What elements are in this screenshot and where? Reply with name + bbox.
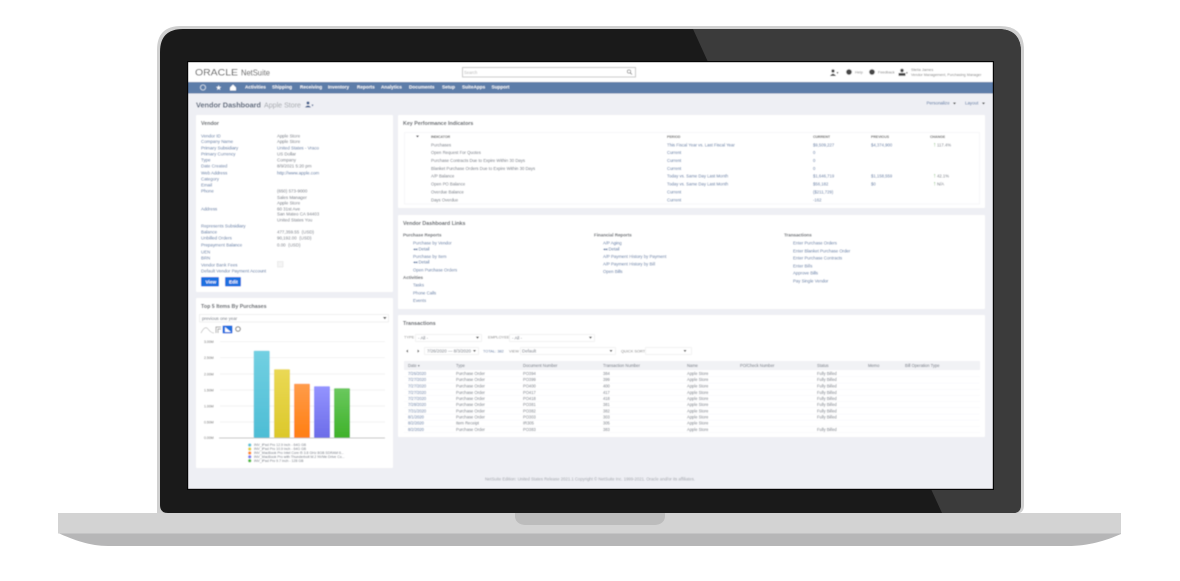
axis labels: 1.50M — [204, 388, 214, 392]
kpi indicators: Open PO Balance — [431, 182, 466, 187]
vendor field labels: Prepayment Balance — [201, 243, 243, 248]
navigation bar: Reports — [357, 85, 375, 90]
vendor field values: Apple Store — [277, 139, 301, 144]
kpi change values: N/A — [937, 182, 944, 187]
vendor field labels: Email — [201, 183, 212, 188]
kpi change values: ↑ — [933, 182, 936, 188]
transaction filters — [404, 334, 692, 354]
kpi current values: ($211,729) — [813, 189, 834, 194]
kpi indicators: Blanket Purchase Orders Due to Expire Within 30 Days — [431, 166, 535, 171]
kpi current values: $56,182 — [813, 182, 829, 187]
axis labels: 1.00M — [204, 404, 214, 408]
laptop lid — [157, 26, 1024, 513]
kpi previous values: $0 — [871, 182, 876, 187]
vendor field labels: Unbilled Orders — [201, 236, 233, 241]
transactions table header: Document Number — [523, 363, 558, 368]
vendor field values: Sales Manager — [277, 195, 307, 200]
kpi periods: Current — [667, 197, 682, 202]
transactions links — [784, 233, 851, 284]
vendor field labels: Category — [201, 177, 220, 182]
navigation bar: Activities — [245, 85, 266, 90]
transaction filters: TYPE — [404, 334, 415, 340]
transactions table rows: 7/26/2020 — [408, 371, 427, 376]
user tools — [830, 67, 982, 77]
kpi current values: $1,646,719 — [813, 174, 835, 179]
vendor field labels: Primary Subsidiary — [201, 145, 239, 150]
transactions table rows: Apple Store — [687, 390, 709, 395]
transactions table rows: Fully Billed — [817, 377, 838, 382]
view button: View — [206, 280, 216, 284]
user tools: Help — [855, 70, 863, 74]
transactions table rows: PO399 — [523, 377, 536, 382]
vendor field labels: UEN — [201, 249, 210, 254]
purchase reports links: Open Purchase Orders — [413, 267, 457, 272]
transactions table rows: Apple Store — [687, 414, 709, 420]
period dropdown: previous one year — [202, 316, 238, 321]
transaction filters: QUICK SORT — [621, 348, 646, 353]
vendor field labels: Vendor ID — [201, 134, 221, 139]
purchase reports links — [403, 233, 457, 272]
transactions table rows: Fully Billed — [817, 414, 838, 420]
transactions links: Enter Purchase Orders — [793, 241, 837, 246]
kpi change values: ↑ — [933, 174, 936, 180]
kpi previous values: $1,158,559 — [871, 174, 893, 179]
transactions table rows: Fully Billed — [817, 371, 838, 376]
panel: key performance indicators — [398, 115, 985, 208]
transactions table rows: PO303 — [523, 414, 536, 420]
kpi indicators: Open Request For Quotes — [431, 150, 481, 155]
financial reports links: Open Bills — [603, 269, 623, 274]
purchase reports links: Purchase by Vendor — [413, 241, 452, 246]
transactions table rows: PO417 — [523, 390, 536, 395]
transactions table rows: Purchase Order — [456, 396, 486, 401]
transactions links: Approve Bills — [793, 271, 818, 276]
transaction filters: - All - — [512, 336, 523, 341]
purchase reports links: Purchase by Item — [413, 254, 447, 259]
chart type icons — [201, 326, 240, 334]
navigation bar: Analytics — [381, 85, 402, 90]
chart legend: INV_iPad Pro 9.7 inch - 128 GB — [254, 459, 304, 463]
kpi change values: ↑ — [933, 142, 936, 148]
kpi current values: 0 — [813, 158, 816, 163]
panel: vendor: Vendor — [201, 121, 219, 127]
nav icons: ★ — [216, 84, 222, 92]
navigation bar: Inventory — [328, 85, 349, 90]
transactions table rows: Purchase Order — [456, 427, 486, 432]
chart legend: INV_iPad Pro 12.9 inch - 64G GB — [254, 443, 307, 447]
transactions table rows: 382 — [603, 408, 611, 414]
transactions table header: Bill Operation Type — [905, 363, 940, 368]
transactions table rows: 400 — [603, 384, 611, 388]
activities links: Phone Calls — [413, 290, 436, 295]
financial reports links: A/P Aging — [603, 241, 622, 246]
footer text: NetSuite Edition: United States Release 2021.1 Copyright © NetSuite Inc. 1999-2021. Oracle and/or its affiliates. — [485, 476, 695, 482]
vendor field values: 477,359.55 (USD) — [277, 230, 315, 235]
chart legend: INV_MacBook Pro with Thunderbolt M.2 NVMe Drive Co... — [254, 455, 345, 459]
vendor field labels: Balance — [201, 230, 218, 235]
vendor field labels: Date Created — [201, 164, 228, 169]
kpi table header: CHANGE — [930, 135, 946, 139]
transactions table header: PO/Check Number — [740, 363, 775, 368]
activities links: Activities — [403, 275, 424, 280]
transactions links: Enter Purchase Contracts — [793, 256, 842, 261]
kpi change values: 117.4% — [937, 142, 951, 147]
transactions table rows: 383 — [603, 427, 611, 432]
vendor field values: Apple Store — [277, 201, 301, 206]
kpi change values — [933, 142, 951, 188]
transaction filters: 7/26/2020 — 8/3/2020 — [427, 349, 471, 354]
user tools: Vendor Management, Purchasing Manager — [911, 73, 982, 77]
navigation bar: Documents — [409, 85, 435, 90]
transactions table rows: 418 — [603, 396, 611, 401]
panel: vendor dashboard links — [398, 215, 985, 309]
kpi periods: Current — [667, 189, 682, 194]
transactions table rows: Apple Store — [687, 427, 709, 432]
vendor field values: United States You — [277, 218, 313, 223]
transactions table header: Type — [456, 363, 466, 368]
page actions: Layout — [965, 101, 979, 106]
logo: NetSuite — [241, 68, 270, 78]
transactions table rows: 8/2/2020 — [408, 420, 425, 426]
transactions table rows: 7/27/2020 — [408, 377, 427, 382]
transactions table rows: Apple Store — [687, 371, 709, 376]
transactions table rows: Purchase Order — [456, 408, 486, 414]
transactions table rows: Apple Store — [687, 420, 709, 426]
chart legend: INV_MacBook Pro Intel Core i5 3.8 GHz 8GB SDRAM 6... — [254, 451, 344, 455]
transactions table header — [404, 361, 980, 370]
transactions table rows: Purchase Order — [456, 377, 486, 382]
transactions table rows: PO418 — [523, 396, 536, 401]
transactions table rows: PO382 — [523, 408, 536, 414]
kpi indicators: Purchases — [431, 142, 451, 147]
kpi periods: This Fiscal Year vs. Last Fiscal Year — [667, 142, 735, 147]
transactions table rows — [404, 371, 980, 432]
user tools: Feedback — [878, 70, 895, 74]
transactions table rows: 384 — [603, 371, 611, 376]
transactions table rows: Apple Store — [687, 402, 709, 407]
edit button: Edit — [229, 280, 238, 284]
logo: ORACLE — [195, 68, 238, 78]
transactions table rows: 7/31/2020 — [408, 408, 427, 414]
nav icons — [200, 84, 236, 92]
kpi current values: $9,509,227 — [813, 142, 835, 147]
chart legend — [248, 443, 345, 463]
financial reports links: A/P Payment History by Payment — [603, 254, 667, 259]
transactions table rows: Apple Store — [687, 384, 709, 388]
navigation bar: Support — [492, 85, 510, 90]
transactions table rows: IR305 — [523, 420, 535, 426]
axis labels: 3.00M — [204, 340, 214, 344]
kpi periods — [667, 142, 735, 202]
transactions table rows: 303 — [603, 414, 611, 420]
top header bar — [188, 62, 993, 82]
transactions table rows: Fully Billed — [817, 396, 838, 401]
transactions table rows: Fully Billed — [817, 384, 838, 388]
transactions table rows: Purchase Order — [456, 414, 486, 420]
purchase reports links: ◂◂ Detail — [413, 260, 430, 265]
transactions table header: Name — [687, 363, 699, 368]
transaction filters: TOTAL: 382 — [483, 348, 504, 353]
kpi table header: INDICATOR — [431, 135, 451, 139]
panel: vendor dashboard links: Vendor Dashboard Links — [403, 221, 465, 227]
financial reports links — [594, 233, 667, 274]
page actions — [926, 101, 985, 106]
vendor field values: United States - Vraco — [277, 145, 320, 150]
vendor field labels: Default Vendor Payment Account — [201, 269, 267, 274]
kpi periods: Current — [667, 158, 682, 163]
kpi current values: 0 — [813, 150, 816, 155]
financial reports links: ◂◂ Detail — [603, 246, 620, 251]
purchase reports links: Purchase Reports — [403, 233, 442, 238]
user tools: Stella James — [911, 67, 933, 72]
panel: key performance indicators: Key Performance Indicators — [403, 121, 473, 127]
kpi indicators — [431, 142, 535, 202]
vendor field values: US Dollar — [277, 152, 297, 157]
vendor field labels: Represents Subsidiary — [201, 224, 246, 229]
kpi periods: Today vs. Same Day Last Month — [667, 182, 729, 187]
kpi current values: 0 — [813, 166, 816, 171]
kpi table header: CURRENT — [813, 135, 831, 139]
panel: vendor — [196, 115, 393, 292]
screen content — [188, 62, 993, 489]
kpi previous values — [871, 142, 893, 187]
kpi current values — [813, 142, 835, 202]
transactions table rows: Purchase Order — [456, 371, 486, 376]
kpi indicators: Overdue Balance — [431, 189, 464, 194]
kpi table header — [416, 135, 946, 139]
transactions links: Enter Bills — [793, 263, 812, 268]
bars — [254, 351, 350, 438]
panel: top 5 items by purchases: Top 5 Items By Purchases — [201, 304, 267, 310]
transactions table rows: 305 — [603, 420, 611, 426]
vendor field values: http://www.apple.com — [277, 170, 319, 175]
transactions table header: Date ▾ — [408, 363, 420, 368]
navigation bar: Shipping — [272, 85, 292, 90]
view button — [201, 277, 219, 286]
kpi previous values: $4,374,900 — [871, 142, 893, 147]
panel: transactions: Transactions — [403, 321, 436, 327]
user tools: ▾ — [836, 70, 839, 75]
purchase reports links: ◂◂ Detail — [413, 246, 430, 251]
transaction filters: EMPLOYEE — [488, 334, 510, 340]
axis labels: 2.50M — [204, 356, 214, 360]
vendor field values: 8/9/2021 5:20 pm — [277, 164, 312, 169]
transactions table rows: PO400 — [523, 384, 536, 388]
navigation bar — [188, 82, 993, 94]
transactions table rows: Apple Store — [687, 396, 709, 401]
axis labels: 0.00M — [204, 436, 214, 440]
vendor field values: Apple Store — [277, 134, 301, 139]
transactions table rows: 417 — [603, 390, 611, 395]
vendor field labels: Primary Currency — [201, 152, 236, 157]
transactions table rows: 7/28/2020 — [408, 402, 427, 407]
transactions table rows: 381 — [603, 402, 611, 407]
transactions table rows: 7/27/2020 — [408, 390, 427, 395]
transactions links: Enter Blanket Purchase Order — [793, 248, 851, 253]
page title: ▾ — [312, 102, 314, 108]
navigation bar: SuiteApps — [462, 85, 486, 90]
vendor field labels: Vendor Bank Fees — [201, 262, 238, 267]
kpi periods: Current — [667, 150, 682, 155]
kpi indicators: Purchase Contracts Due to Expire Within 30 Days — [431, 158, 525, 163]
activities links: Events — [413, 298, 426, 303]
vendor field labels: Company Name — [201, 139, 234, 144]
bar chart — [204, 340, 385, 440]
page title: Vendor Dashboard — [196, 100, 261, 110]
axis labels: 0.50M — [204, 420, 214, 424]
edit button — [225, 277, 241, 286]
transaction filters: VIEW — [509, 348, 519, 353]
transactions table header: Transaction Number — [603, 363, 641, 368]
vendor field values: San Mateo CA 94403 — [277, 212, 320, 217]
activities links: Tasks — [413, 283, 424, 288]
panel: transactions — [398, 315, 985, 437]
navigation bar: Receiving — [300, 85, 322, 90]
axis labels: 2.00M — [204, 372, 214, 376]
financial reports links: A/P Payment History by Bill — [603, 262, 655, 267]
logo — [195, 68, 270, 78]
user tools: ▾ — [906, 71, 908, 75]
navigation bar: Setup — [442, 85, 455, 90]
search box — [462, 68, 636, 77]
vendor field labels: BRN — [201, 255, 210, 260]
transactions table rows: Purchase Order — [456, 402, 486, 407]
transactions table header: Memo — [868, 363, 880, 368]
financial reports links: Financial Reports — [594, 233, 632, 238]
kpi periods: Current — [667, 166, 682, 171]
search box: Search — [464, 70, 478, 75]
period dropdown — [200, 314, 388, 322]
vendor field values — [277, 134, 320, 248]
kpi table header: PERIOD — [667, 135, 681, 139]
transactions table rows: PO394 — [523, 371, 536, 376]
activities links — [403, 275, 436, 303]
transactions links: Transactions — [784, 233, 812, 238]
kpi change values: 42.1% — [937, 174, 949, 179]
transactions table rows: Item Receipt — [456, 420, 480, 426]
vendor field values: 60 31st Ave — [277, 206, 301, 211]
kpi table header: PREVIOUS — [871, 135, 890, 139]
laptop base — [58, 513, 1121, 546]
transactions table rows: PO383 — [523, 427, 536, 432]
vendor field labels: Type — [201, 158, 211, 163]
chart legend: INV_iPad Pro 10.9 inch - 64G GB — [254, 447, 307, 451]
transaction filters: Default — [522, 349, 537, 354]
transaction filters: - All - — [418, 336, 429, 341]
transactions links: Pay Single Vendor — [793, 279, 829, 284]
transactions table rows: 7/27/2020 — [408, 396, 427, 401]
vendor field labels: Address — [201, 206, 218, 211]
panel: top 5 items by purchases — [196, 298, 393, 468]
vendor field labels: Web Address — [201, 170, 228, 175]
transactions table rows: Apple Store — [687, 408, 709, 414]
transactions table header: Status — [817, 363, 829, 368]
vendor field labels — [201, 134, 267, 274]
kpi indicators: A/P Balance — [431, 174, 455, 179]
checkbox — [278, 262, 283, 267]
page title — [196, 100, 314, 110]
transactions table rows: 8/2/2020 — [408, 427, 425, 432]
vendor field values: 0.00 (USD) — [277, 243, 301, 248]
transactions table rows: Purchase Order — [456, 390, 486, 395]
page actions: Personalize — [926, 101, 950, 106]
kpi periods: Today vs. Same Day Last Month — [667, 174, 729, 179]
vendor field values: Company — [277, 158, 297, 163]
transactions table rows: Fully Billed — [817, 408, 838, 414]
page title: Apple Store — [264, 100, 301, 110]
vendor field labels: Phone — [201, 189, 214, 194]
kpi current values: -162 — [813, 197, 822, 202]
vendor field values: (650) 573-9000 — [277, 189, 308, 194]
transactions table rows: Purchase Order — [456, 384, 486, 388]
transactions table rows: Fully Billed — [817, 402, 838, 407]
transactions table rows: PO381 — [523, 402, 536, 407]
transactions table rows: Fully Billed — [817, 390, 838, 395]
transactions table rows: Apple Store — [687, 377, 709, 382]
transactions table rows: 8/1/2020 — [408, 414, 425, 420]
kpi indicators: Days Overdue — [431, 197, 459, 202]
vendor field values: 90,192.00 (USD) — [277, 236, 312, 241]
transactions table rows: 399 — [603, 377, 611, 382]
axis labels — [204, 340, 214, 440]
transactions table rows: Fully Billed — [817, 427, 838, 432]
transactions table rows: 7/27/2020 — [408, 384, 427, 388]
